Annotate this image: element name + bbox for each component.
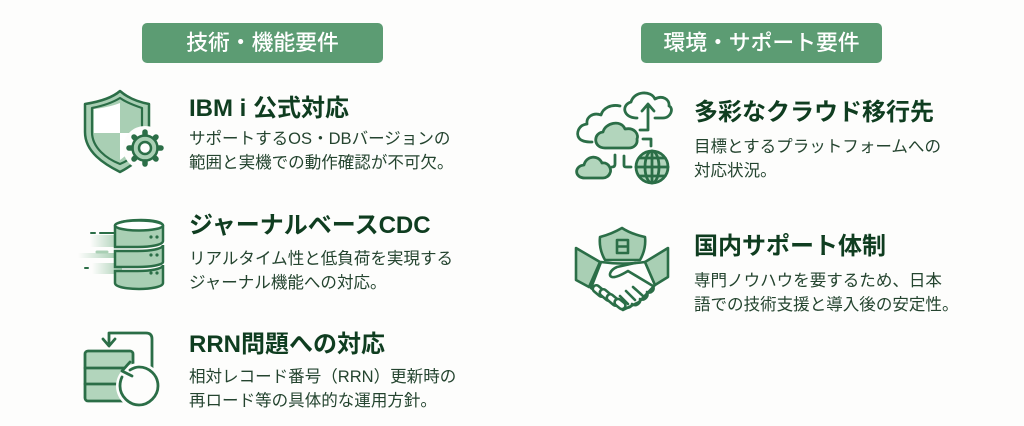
text: 再ロード等の具体的な運用方針。 xyxy=(189,391,437,410)
text: domestic support xyxy=(694,233,958,314)
heading: technical requirements: 技術・機能要件 xyxy=(186,30,339,55)
text: RRN issue xyxy=(189,331,456,410)
icon: handshake with shield xyxy=(574,226,670,312)
icon: database with motion lines xyxy=(82,218,164,290)
text: 多彩なクラウド移行先 xyxy=(694,99,934,126)
text: ジャーナルベースCDC xyxy=(189,212,431,239)
text: 目標とするプラットフォームへの xyxy=(694,137,941,156)
text: IBM i support xyxy=(189,95,454,172)
icon: table with refresh arrows xyxy=(84,332,160,406)
text: IBM i 公式対応 xyxy=(189,95,349,122)
icon: clouds and globe xyxy=(575,92,673,184)
text: 相対レコード番号（RRN）更新時の xyxy=(189,367,456,386)
text: 語での技術支援と導入後の安定性。 xyxy=(694,295,958,314)
text: RRN問題への対応 xyxy=(189,331,385,358)
text: journal-based CDC xyxy=(189,212,453,292)
heading: technical requirements xyxy=(142,23,383,63)
text: 専門ノウハウを要するため、日本 xyxy=(694,271,942,290)
icon: shield with gear xyxy=(84,90,164,174)
text: ジャーナル機能への対応。 xyxy=(189,273,387,292)
heading: environment and support: 環境・サポート要件 xyxy=(663,30,860,55)
text: 範囲と実機での動作確認が不可欠。 xyxy=(189,153,454,172)
text: cloud destinations xyxy=(694,99,941,180)
text: サポートするOS・DBバージョンの xyxy=(189,129,450,148)
text: リアルタイム性と低負荷を実現する xyxy=(189,249,453,268)
text: 国内サポート体制 xyxy=(694,233,886,260)
heading: environment and support xyxy=(641,23,882,63)
text: 対応状況。 xyxy=(694,161,777,180)
